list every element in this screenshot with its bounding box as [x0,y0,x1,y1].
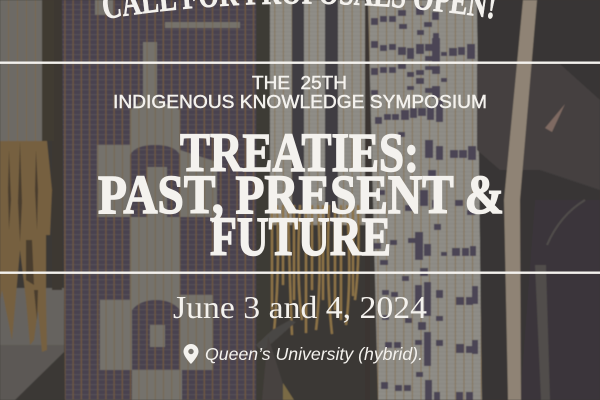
subtitle line 1: THE 25TH [252,73,347,93]
left belt [0,0,42,141]
top of dark column between belts [256,0,270,400]
left fringe [0,141,52,352]
title: TREATIES: [180,122,419,183]
purple belt light motif [95,0,240,400]
right belt [368,0,482,400]
purple motif ring [132,300,180,370]
right dark area [477,0,600,400]
date: June 3 and 4, 2024 [173,289,427,325]
location: Queen’s University (hybrid). [205,344,423,364]
subtitle line 2: INDIGENOUS KNOWLEDGE SYMPOSIUM [113,92,487,112]
purple motif arc [130,145,180,217]
title: PAST, PRESENT & [98,164,504,225]
left grey floor area [0,288,64,345]
dark strip [52,0,62,290]
title: FUTURE [210,206,391,267]
divider: top [0,62,600,64]
middle belt [270,0,367,225]
divider: bottom [0,272,600,274]
icon: location pin [184,344,198,364]
wooden pole [504,0,537,400]
right belt purple marks [371,6,478,400]
grey cone [256,320,296,352]
purple belt [62,0,256,400]
title [98,122,504,267]
heading: call for proposals [103,0,494,19]
middle fringe [272,205,359,335]
metal rod [535,265,550,400]
